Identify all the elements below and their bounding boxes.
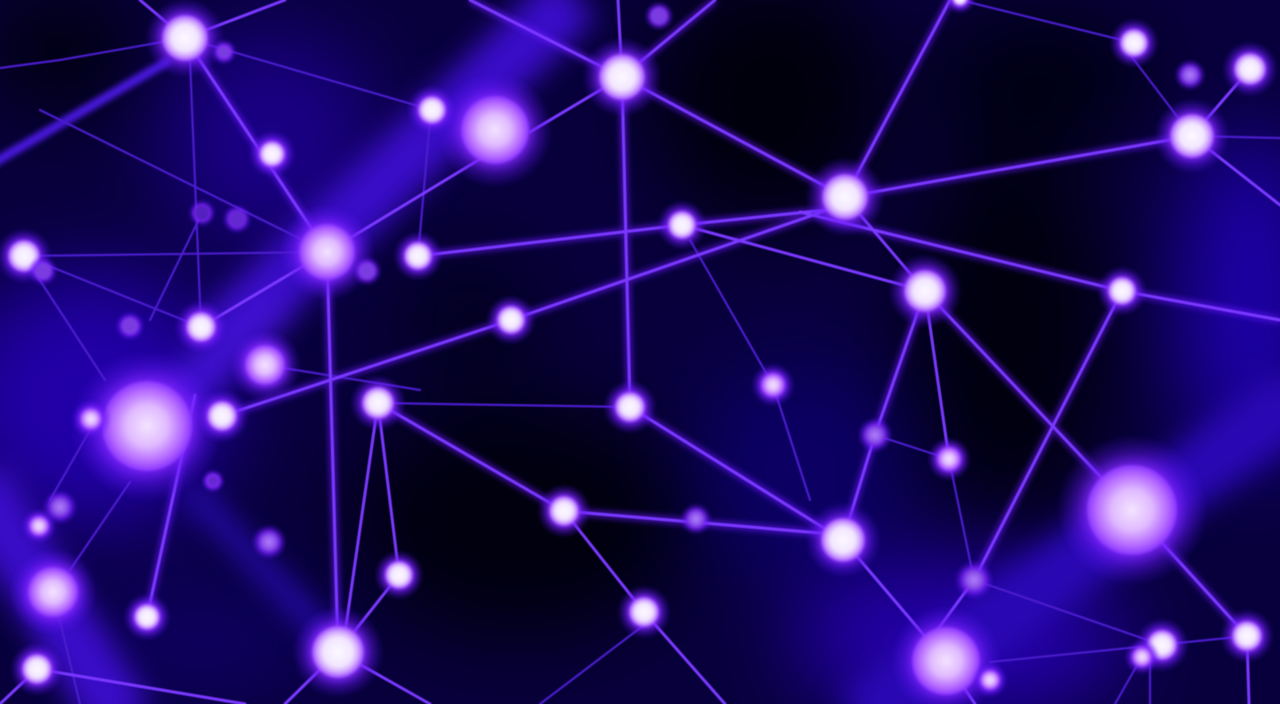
medium bright nodes: [145, 0, 1230, 578]
